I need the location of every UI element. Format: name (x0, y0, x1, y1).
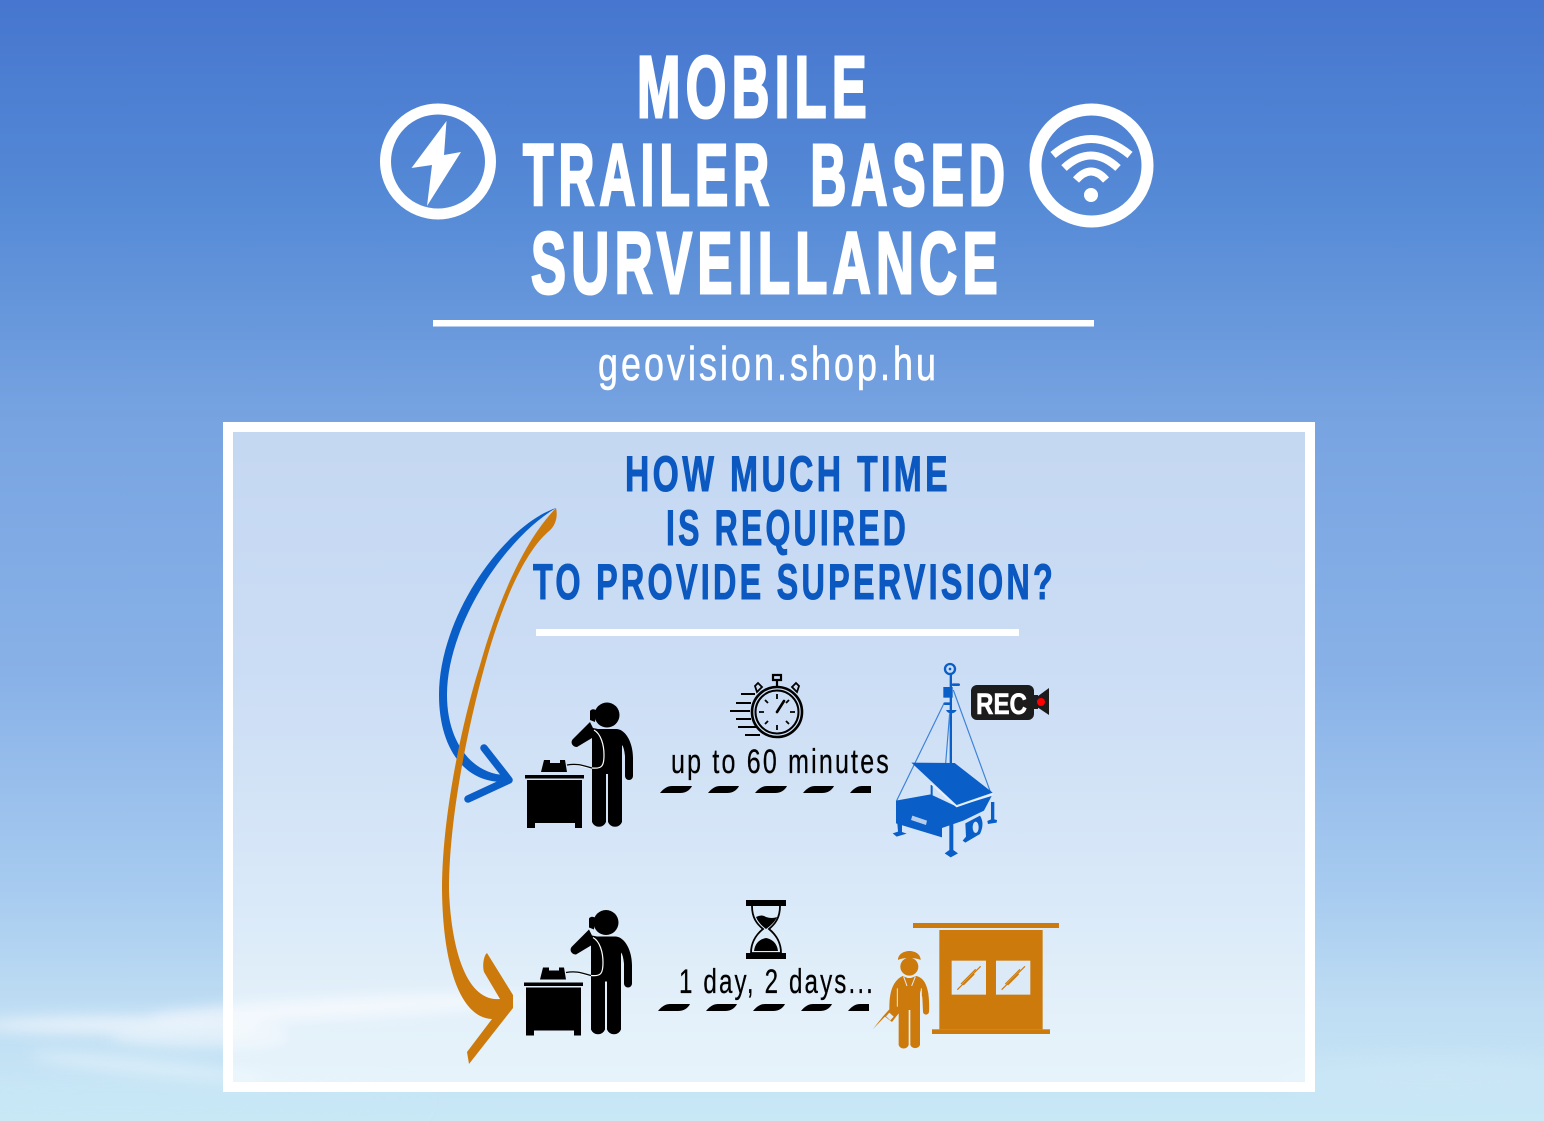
legs and feet (893, 823, 907, 837)
icon: security guard (873, 951, 929, 1048)
icon: wifi in circle (1036, 110, 1148, 222)
label: 1 day, 2 days: 1 day, 2 days... (679, 963, 875, 1001)
icon: stopwatch (730, 675, 802, 737)
heading rule (536, 629, 1019, 636)
icon: person on telephone, fast option (525, 702, 633, 828)
title: TRAILER BASED (523, 127, 1010, 224)
wheel (963, 816, 982, 843)
icon: guard booth (913, 923, 1059, 1034)
guy wires (897, 690, 991, 801)
icon: rec camera badge: REC (976, 688, 1027, 721)
dashed line: fast option (660, 786, 871, 793)
arrow: orange, to slow option (442, 508, 557, 1064)
title: SURVEILLANCE (531, 215, 1003, 312)
icon: lightning bolt in circle (386, 109, 490, 214)
icon: surveillance trailer (893, 664, 997, 857)
title rule (433, 320, 1094, 326)
icon: person on telephone, slow option (524, 910, 632, 1036)
arrow: blue, to fast option (439, 508, 556, 799)
solar panel (931, 783, 993, 807)
panel heading: IS REQUIRED (666, 500, 909, 556)
icon: hourglass (746, 900, 786, 959)
panel heading: TO PROVIDE SUPERVISION? (533, 554, 1056, 610)
person silhouette (572, 702, 633, 827)
desk and telephone (525, 760, 584, 828)
panel: time required (228, 427, 1310, 1087)
mast and camera (945, 664, 955, 674)
desk and telephone (524, 968, 583, 1036)
title (523, 39, 1010, 312)
panel heading: HOW MUCH TIME (625, 446, 951, 502)
website url: geovision.shop.hu (598, 337, 939, 390)
title: MOBILE (637, 39, 872, 136)
trailer body (896, 794, 992, 837)
label: up to 60 minutes: up to 60 minutes (671, 743, 891, 781)
panel heading (533, 446, 1056, 610)
person silhouette (571, 910, 632, 1034)
dashed line: slow option (658, 1004, 869, 1011)
